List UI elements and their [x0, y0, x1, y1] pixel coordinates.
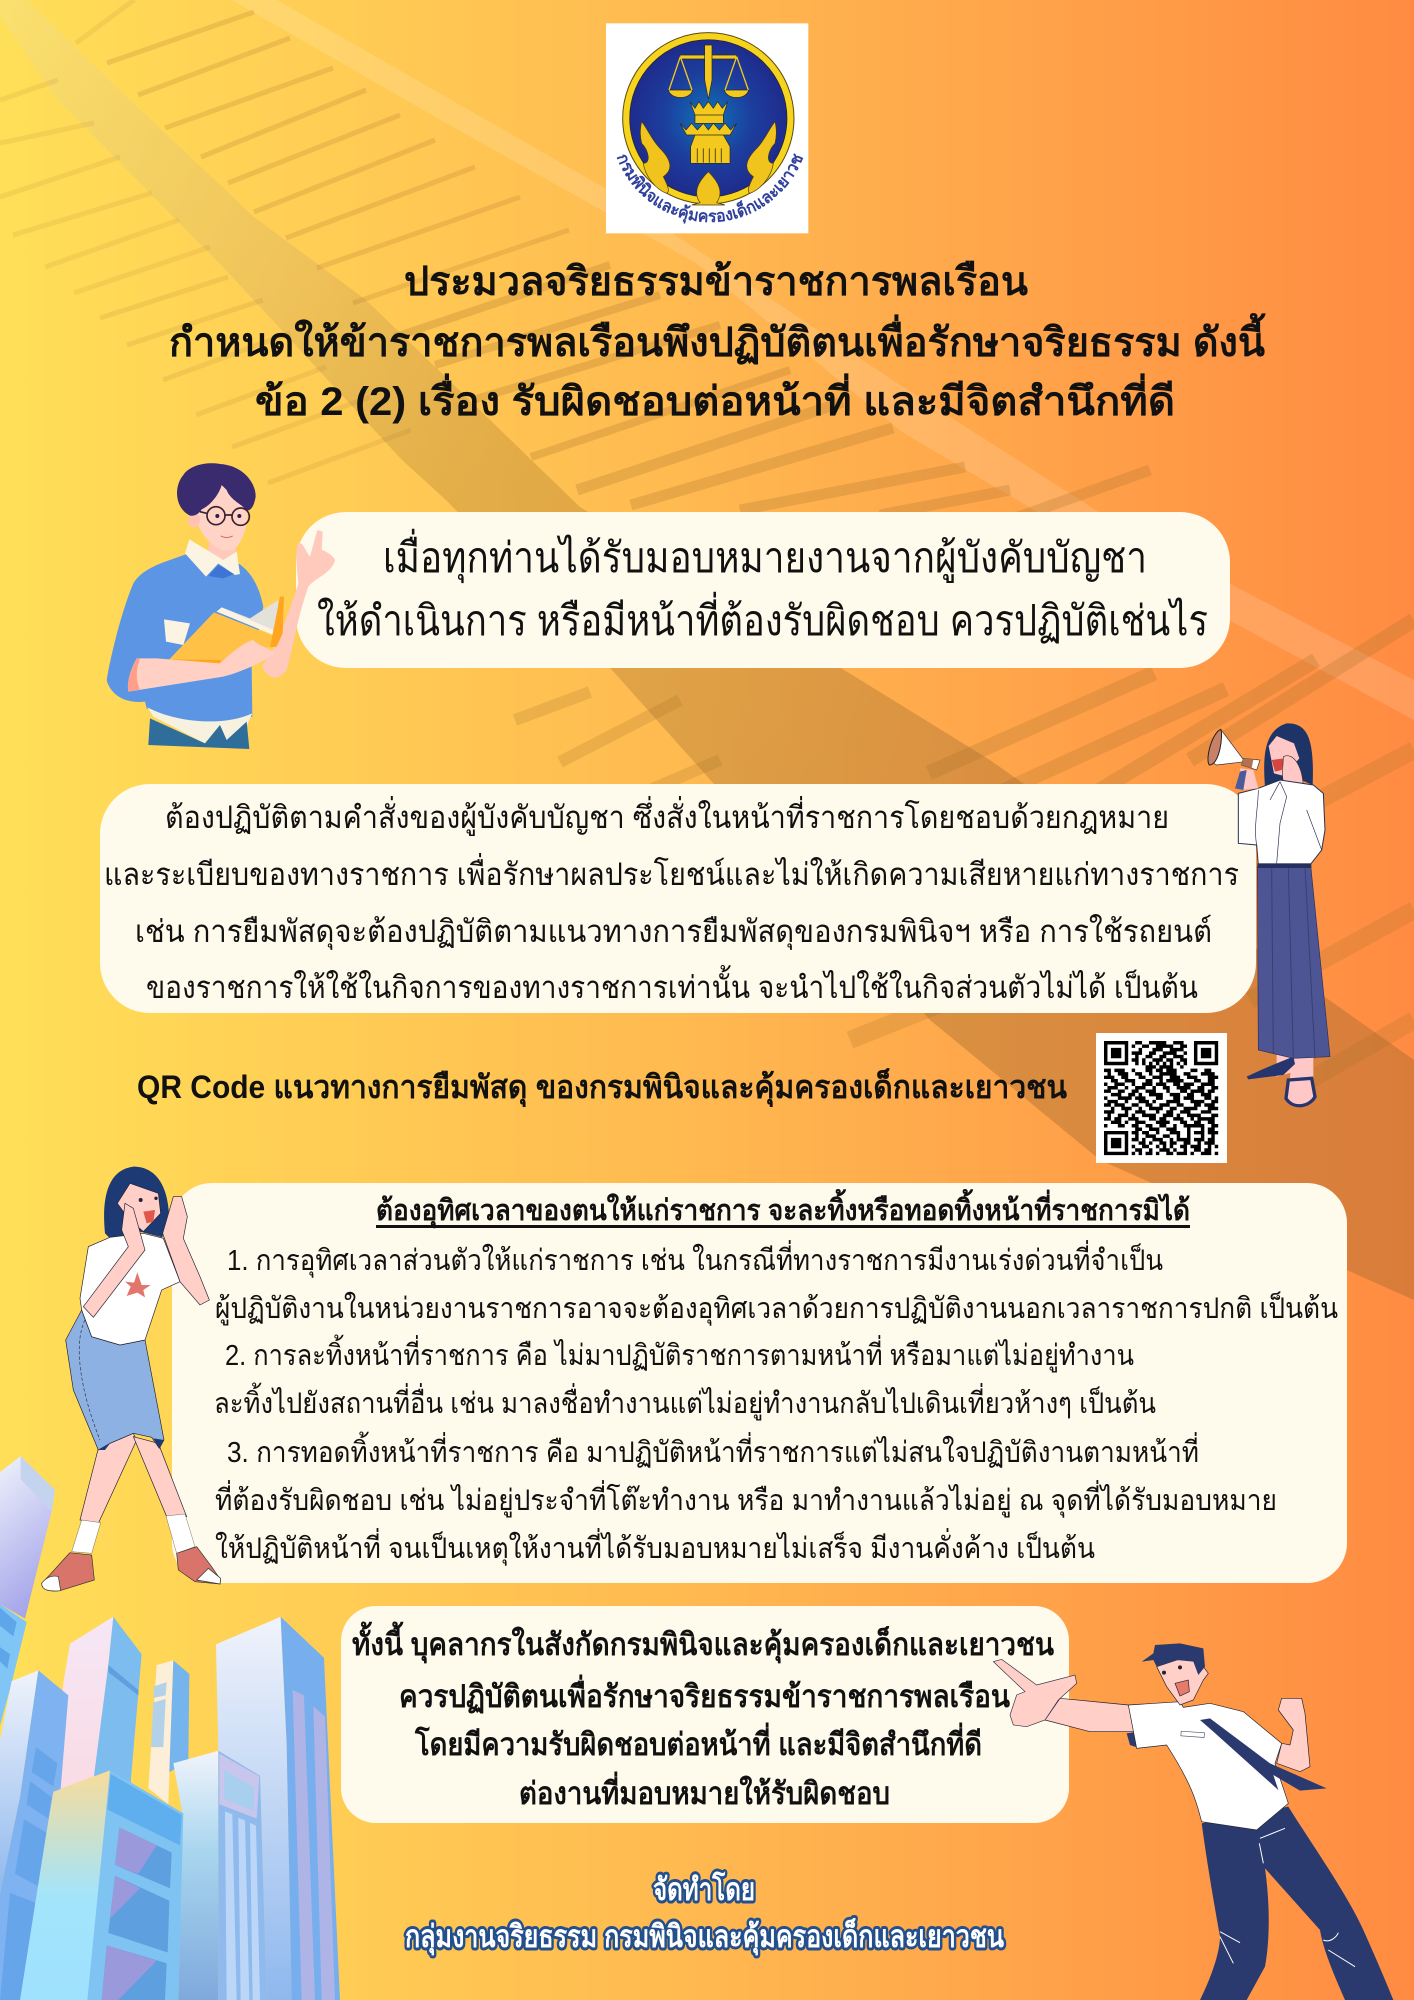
QR code — [1096, 1033, 1227, 1163]
logo: scales of justice — [668, 45, 749, 163]
panel: duties bubble — [172, 1183, 1347, 1583]
panel: answer bubble: ต้องปฏิบัติตามคำสั่งของผู้บังคับบัญชา ซึ่งสั่งในหน้าที่ราชการโดยชอบด้วยกฎหมาย — [165, 796, 1169, 836]
panel: answer bubble: เช่น การยืมพัสดุจะต้องปฏิบัติตามแนวทางการยืมพัสดุของกรมพินิจฯ หรือ การใช้รถยนต์ — [135, 914, 1212, 951]
panel: conclusion bubble: ทั้งนี้ บุคลากรในสังกัดกรมพินิจและคุ้มครองเด็กและเยาวชน — [352, 1621, 1054, 1664]
panel: conclusion bubble: ควรปฏิบัติตนเพื่อรักษาจริยธรรมข้าราชการพลเรือน — [399, 1674, 1010, 1714]
panel: duties bubble: 2. การละทิ้งหน้าที่ราชการ คือ ไม่มาปฏิบัติราชการตามหน้าที่ หรือมาแต่ไม่อยู่ทำงาน — [225, 1334, 1134, 1373]
panel: conclusion bubble — [341, 1606, 1069, 1823]
panel: duties bubble: 1. การอุทิศเวลาส่วนตัวให้แก่ราชการ เช่น ในกรณีที่ทางราชการมีงานเร่งด่วนที่จำเป็น — [227, 1240, 1163, 1278]
panel: answer bubble: ของราชการให้ใช้ในกิจการของทางราชการเท่านั้น จะนำไปใช้ในกิจส่วนตัวไม่ได้ เป็นต้น — [146, 965, 1198, 1005]
panel: question bubble — [296, 512, 1230, 668]
title — [169, 260, 1267, 424]
panel: conclusion bubble: ต่องานที่มอบหมายให้รับผิดชอบ — [519, 1771, 890, 1811]
QR code caption: QR Code แนวทางการยืมพัสดุ ของกรมพินิจและคุ้มครองเด็กและเยาวชน — [137, 1067, 1067, 1108]
title: ข้อ 2 (2) เรื่อง รับผิดชอบต่อหน้าที่ และมีจิตสำนึกที่ดี — [255, 373, 1175, 424]
title: กำหนดให้ข้าราชการพลเรือนพึงปฏิบัติตนเพื่อรักษาจริยธรรม ดังนี้ — [169, 313, 1267, 365]
title: ประมวลจริยธรรมข้าราชการพลเรือน — [404, 260, 1028, 304]
panel: question bubble: ให้ดำเนินการ หรือมีหน้าที่ต้องรับผิดชอบ ควรปฏิบัติเช่นไร — [317, 592, 1208, 644]
panel: conclusion bubble: โดยมีความรับผิดชอบต่อหน้าที่ และมีจิตสำนึกที่ดี — [414, 1722, 982, 1762]
panel: duties bubble: ละทิ้งไปยังสถานที่อื่น เช่น มาลงชื่อทำงานแต่ไม่อยู่ทำงานกลับไปเดินเที่ยวห้างๆ เป็นต้น — [214, 1382, 1156, 1421]
illustration: man with book — [107, 463, 335, 749]
footer credit: กลุ่มงานจริยธรรม กรมพินิจและคุ้มครองเด็กและเยาวชน — [405, 1917, 1004, 1956]
duties heading: ต้องอุทิศเวลาของตนให้แก่ราชการ จะละทิ้งหรือทอดทิ้งหน้าที่ราชการมิได้ — [376, 1188, 1190, 1228]
panel: duties bubble: 3. การทอดทิ้งหน้าที่ราชการ คือ มาปฏิบัติหน้าที่ราชการแต่ไม่สนใจปฏิบัติงานตามหน้าที่ — [227, 1431, 1199, 1469]
illustration: man pointing — [993, 1643, 1393, 2000]
logo: department seal — [606, 23, 808, 234]
panel: question bubble: เมื่อทุกท่านได้รับมอบหมายงานจากผู้บังคับบัญชา — [383, 529, 1147, 584]
panel: duties bubble: ที่ต้องรับผิดชอบ เช่น ไม่อยู่ประจำที่โต๊ะทำงาน หรือ มาทำงานแล้วไม่อยู่ ณ จุดที่ได้รับมอบหมาย — [215, 1480, 1277, 1518]
footer credit: จัดทำโดย — [653, 1871, 755, 1907]
background: escalator rails and rungs — [0, 0, 1414, 1300]
panel: answer bubble — [100, 784, 1256, 1013]
panel: duties bubble: ให้ปฏิบัติหน้าที่ จนเป็นเหตุให้งานที่ได้รับมอบหมายไม่เสร็จ มีงานคั่งค้าง เป็นต้น — [215, 1528, 1095, 1566]
illustration: city buildings — [0, 1456, 340, 2000]
footer credit — [405, 1871, 1004, 1956]
panel: answer bubble: และระเบียบของทางราชการ เพื่อรักษาผลประโยชน์และไม่ให้เกิดความเสียหายแก่ทางราชการ — [104, 853, 1239, 892]
illustration: woman with megaphone — [1208, 723, 1330, 1106]
illustration: woman calling out — [42, 1167, 221, 1591]
